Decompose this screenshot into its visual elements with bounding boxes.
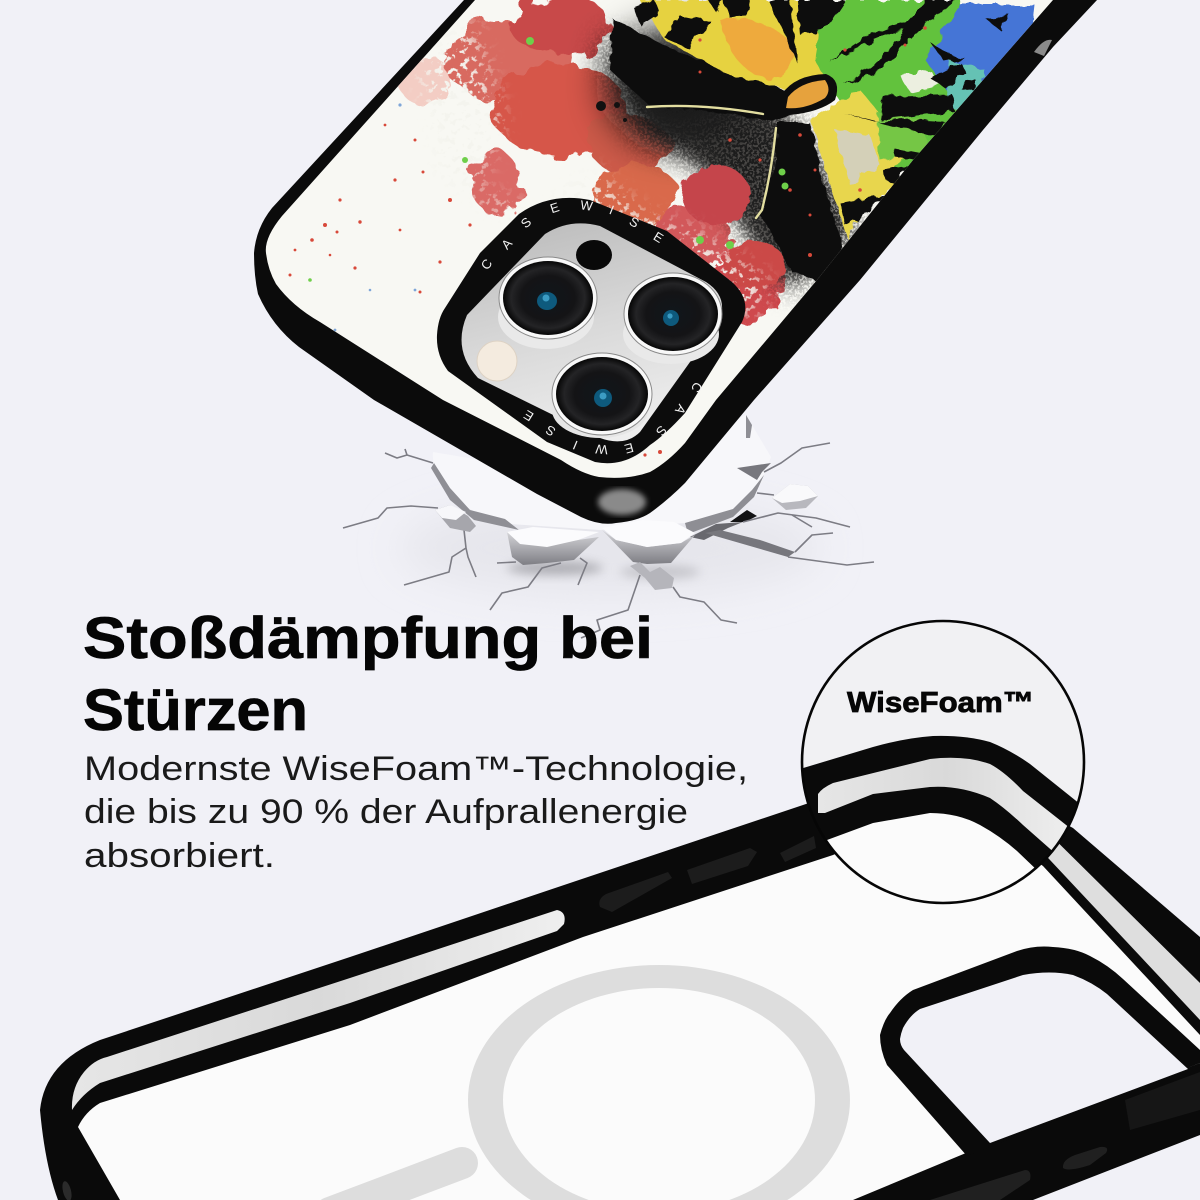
top phone with printed case bbox=[254, 0, 1097, 524]
CASEWISE lettering: A bbox=[672, 402, 689, 418]
magnified frame bbox=[803, 736, 1077, 902]
lens top left bbox=[498, 257, 597, 349]
antennae bbox=[647, 106, 776, 218]
CASEWISE lettering: E bbox=[651, 229, 666, 246]
magsafe alignment pill bbox=[330, 1163, 462, 1200]
callout label: WiseFoam™ bbox=[847, 687, 1034, 719]
lidar bbox=[576, 240, 612, 270]
CASEWISE lettering: S bbox=[627, 213, 642, 231]
black spray bbox=[608, 27, 752, 143]
CASEWISE lettering: E bbox=[623, 440, 635, 457]
chunk left bbox=[507, 527, 599, 565]
CASEWISE lettering: S bbox=[653, 423, 670, 439]
CASEWISE lettering: E bbox=[548, 199, 561, 216]
lower clear case bbox=[40, 765, 1200, 1200]
chunk centre bbox=[602, 520, 695, 564]
bottom ports bbox=[930, 1147, 1107, 1200]
camera opening bbox=[900, 972, 1188, 1143]
printed artwork bbox=[266, 0, 1053, 478]
CASEWISE lettering: W bbox=[594, 441, 608, 457]
clear back panel bbox=[78, 819, 1200, 1200]
body text: absorbiert. bbox=[84, 837, 275, 875]
CASEWISE lettering: E bbox=[521, 407, 536, 424]
camera cutout bbox=[880, 946, 1200, 1156]
bottom corner sheen bbox=[1125, 1072, 1200, 1130]
CASEWISE lettering: S bbox=[543, 422, 558, 439]
CASEWISE lettering: A bbox=[498, 236, 515, 252]
phone case body bbox=[254, 0, 1097, 524]
body text bbox=[84, 750, 748, 875]
paint specks bbox=[288, 26, 927, 457]
case frame bbox=[40, 765, 1200, 1200]
WiseFoam magnifier callout bbox=[790, 621, 1090, 915]
wing markings bbox=[634, 0, 1010, 225]
lower black wing bbox=[760, 122, 843, 282]
CASEWISE lettering: C bbox=[688, 379, 706, 395]
right clear gap bbox=[1020, 805, 1200, 1020]
CASEWISE lettering: I bbox=[607, 202, 616, 217]
CASEWISE lettering bbox=[478, 197, 706, 457]
paint splashes bbox=[397, 0, 785, 323]
side button highlight bbox=[1034, 40, 1052, 56]
heading: Stürzen bbox=[83, 678, 308, 743]
camera plate bbox=[462, 223, 722, 441]
red blob on spray bbox=[682, 165, 750, 225]
CASEWISE lettering: W bbox=[580, 197, 594, 214]
side slot bbox=[61, 1180, 73, 1200]
lens bottom bbox=[552, 353, 652, 438]
volume buttons bbox=[599, 836, 816, 912]
butterfly body bbox=[775, 74, 838, 120]
lens right bbox=[623, 273, 722, 364]
body text: die bis zu 90 % der Aufprallenergie bbox=[84, 793, 688, 831]
heading bbox=[83, 606, 653, 743]
left clear gap bbox=[72, 910, 565, 1110]
butterfly colour fields bbox=[610, 0, 1035, 240]
heading: Stoßdämpfung bei bbox=[83, 606, 653, 671]
white paint flecks bbox=[420, 20, 770, 320]
camera module bbox=[437, 197, 745, 463]
impact crater with cracks bbox=[343, 415, 874, 638]
phone corner highlight bbox=[598, 489, 646, 515]
CASEWISE lettering: I bbox=[571, 438, 580, 453]
magsafe ring bbox=[468, 965, 850, 1200]
small chunks bbox=[435, 484, 818, 590]
body text: Modernste WiseFoam™-Technologie, bbox=[84, 750, 748, 788]
CASEWISE lettering: C bbox=[478, 256, 495, 273]
CASEWISE lettering: S bbox=[518, 214, 534, 231]
grey spray underlay bbox=[620, 60, 850, 285]
flash bbox=[477, 341, 517, 381]
